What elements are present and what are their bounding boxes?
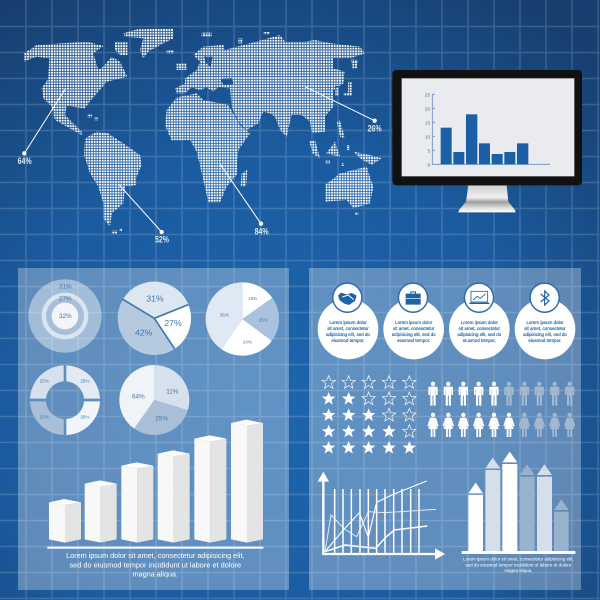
left caption: Lorem ipsum dolor sit amet, consectetur adipisicing elit, <box>66 551 244 560</box>
arrow bar chart <box>462 452 575 554</box>
info bubble: handshake <box>318 282 378 359</box>
info bubble: bluetooth: adipisicing elit, sed do <box>523 332 567 337</box>
icon: laptop chart <box>469 291 489 303</box>
pie chart 15 25 24 36: 15% <box>248 296 257 301</box>
info bubble: handshake: Lorem ipsum dolor <box>329 320 367 325</box>
donut chart four quarters: 25% <box>40 414 49 419</box>
pie chart 31 27 42 <box>118 282 191 355</box>
callout: 26% <box>305 87 382 133</box>
callout: 64% <box>18 88 66 166</box>
info bubble: briefcase <box>383 282 444 359</box>
info bubble: laptop <box>449 282 510 359</box>
callout: 64%: 64% <box>18 156 32 166</box>
panel: right infographics <box>309 268 581 590</box>
donut chart four quarters: 25% <box>40 379 49 384</box>
info bubble: bluetooth: eiusmod tempor. <box>528 338 562 343</box>
info bubble: handshake: eiusmod tempor. <box>331 338 365 343</box>
donut chart four quarters: 25% <box>80 379 90 384</box>
info bubble: handshake: sit amet, consectetur <box>327 326 369 331</box>
left caption: magna aliqua. <box>133 570 178 579</box>
callout: 26%: 26% <box>368 123 382 133</box>
concentric ring chart <box>28 279 102 353</box>
info bubble: laptop: adipisicing elit, sed do <box>457 332 502 337</box>
concentric ring chart: 31% <box>59 284 72 291</box>
info bubble: bluetooth: sit amet, consectetur <box>524 326 566 331</box>
pie chart 64 11 25: 64% <box>132 393 145 400</box>
3D bar chart <box>47 420 263 549</box>
right caption: Lorem ipsum dolor sit amet, consectetur adipisicing elit, <box>463 557 574 562</box>
info bubble: briefcase: adipisicing elit, sed do <box>392 332 436 337</box>
info bubble: bluetooth: Lorem ipsum dolor <box>526 320 564 325</box>
info bubble: laptop: Lorem ipsum dolor <box>461 320 498 325</box>
pictogram: men <box>428 382 574 406</box>
monitor stand <box>458 185 516 212</box>
pie chart 64 11 25: 25% <box>155 416 168 423</box>
screen bar chart: 25 <box>425 92 431 98</box>
screen bar chart <box>425 92 550 168</box>
concentric ring chart: 27% <box>59 296 72 303</box>
info bubble: briefcase: sit amet, consectetur <box>393 326 435 331</box>
pictogram: women <box>427 413 575 437</box>
star rating grid <box>322 376 416 454</box>
callout: 52% <box>119 185 169 245</box>
screen bar chart: 5 <box>428 148 431 154</box>
pie chart 31 27 42: 42% <box>135 328 153 338</box>
icon: handshake <box>338 293 357 305</box>
info bubble: briefcase: eiusmod tempor. <box>397 338 430 343</box>
concentric ring chart: 32% <box>59 313 72 320</box>
pie chart 64 11 25 <box>119 365 189 435</box>
pie chart 15 25 24 36 <box>206 282 279 356</box>
left caption: sed do eiusmod tempor incididunt ut labore et dolore <box>69 560 241 569</box>
left caption <box>66 551 244 579</box>
info bubble: laptop: sit amet, consectetur <box>459 326 501 331</box>
screen bar chart: 10 <box>425 134 431 140</box>
screen bar chart: 15 <box>425 120 431 126</box>
right caption <box>463 557 574 573</box>
icon: bluetooth <box>541 291 549 305</box>
screen bar chart: 20 <box>425 106 431 112</box>
callout: 84% <box>220 164 269 237</box>
screen bar chart: 0 <box>428 162 431 168</box>
line chart with arrows <box>318 472 445 560</box>
info bubble: laptop: eiusmod tempor. <box>463 338 496 343</box>
dotted world map <box>18 28 382 245</box>
panel: left charts <box>18 268 289 590</box>
pie chart 15 25 24 36: 25% <box>259 318 268 323</box>
info bubble: handshake: adipisicing elit, sed do <box>326 332 370 337</box>
info bubble: bluetooth <box>515 282 575 359</box>
pie chart 15 25 24 36: 24% <box>243 339 252 344</box>
monitor with bar chart <box>392 70 582 212</box>
pie chart 31 27 42: 27% <box>164 318 182 328</box>
callout: 84%: 84% <box>255 227 269 237</box>
monitor screen <box>402 78 574 176</box>
right caption: magna aliqua. <box>504 568 532 573</box>
pie chart 64 11 25: 11% <box>166 388 179 395</box>
right caption: sed do eiusmod tempor incididunt ut labore et dolore <box>465 562 572 567</box>
donut chart four quarters <box>30 365 100 435</box>
donut chart four quarters: 25% <box>80 414 90 419</box>
pie chart 15 25 24 36: 36% <box>220 312 229 317</box>
icon: briefcase <box>406 291 421 305</box>
pie chart 31 27 42: 31% <box>146 294 164 304</box>
continents <box>24 28 382 233</box>
monitor frame <box>392 70 582 185</box>
callout: 52%: 52% <box>155 235 169 245</box>
info bubble: briefcase: Lorem ipsum dolor <box>395 320 433 325</box>
